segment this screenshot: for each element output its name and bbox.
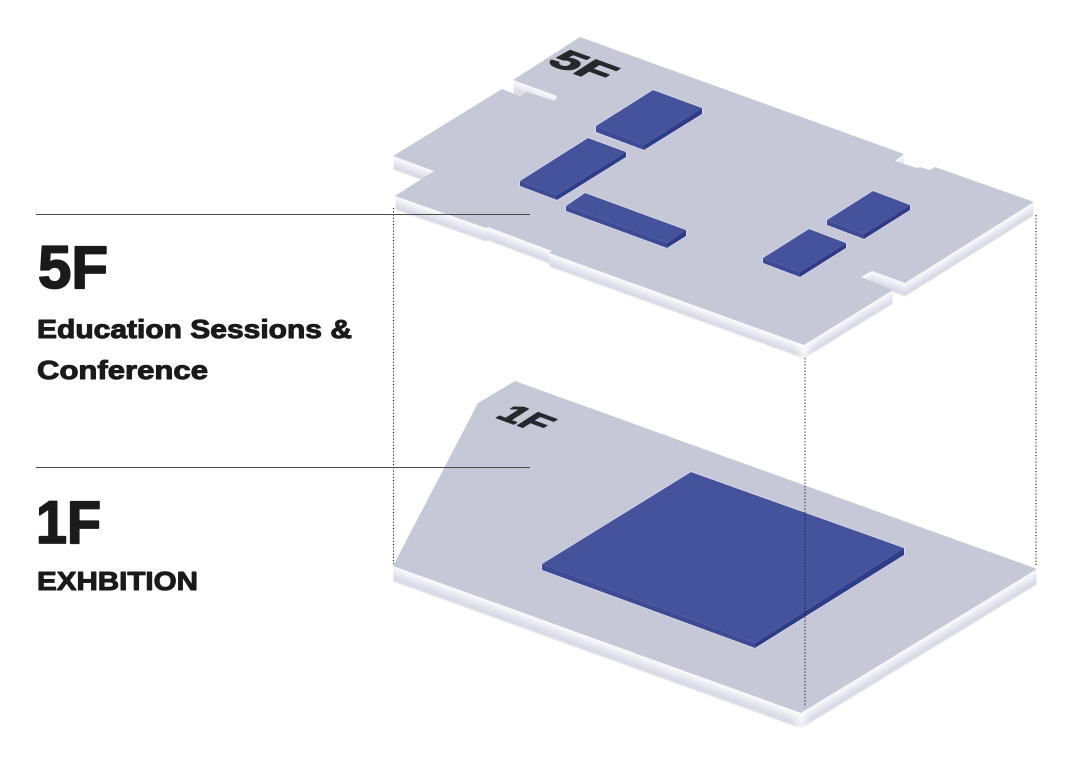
5F plate top <box>393 37 1034 345</box>
5F heading: 5F <box>38 234 108 301</box>
5F corner highlight <box>794 339 814 358</box>
1F isometric label: 1F <box>487 400 564 438</box>
1F plate top <box>393 381 1037 713</box>
1F plate side extrusion <box>393 382 1037 729</box>
1F exhibition hall block <box>542 472 904 648</box>
dotted vertical connector lines <box>394 208 1036 707</box>
room block B <box>520 138 626 200</box>
5F leader line <box>36 214 530 216</box>
1F heading: 1F <box>36 489 101 556</box>
room block E <box>763 229 846 277</box>
5F floor plate <box>393 37 1034 359</box>
5F isometric label: 5F <box>538 45 628 88</box>
room block C <box>566 193 686 248</box>
room block D <box>827 191 910 239</box>
1F floor plate <box>393 381 1037 729</box>
room block A <box>596 90 702 150</box>
5F description: Education Sessions & <box>37 314 352 344</box>
1F corner highlight <box>791 707 811 729</box>
1F leader line <box>36 466 530 468</box>
5F plate side extrusion <box>393 38 1034 359</box>
5F description <box>37 314 352 385</box>
5F description: Conference <box>37 355 208 385</box>
1F description: EXHBITION <box>37 566 198 596</box>
